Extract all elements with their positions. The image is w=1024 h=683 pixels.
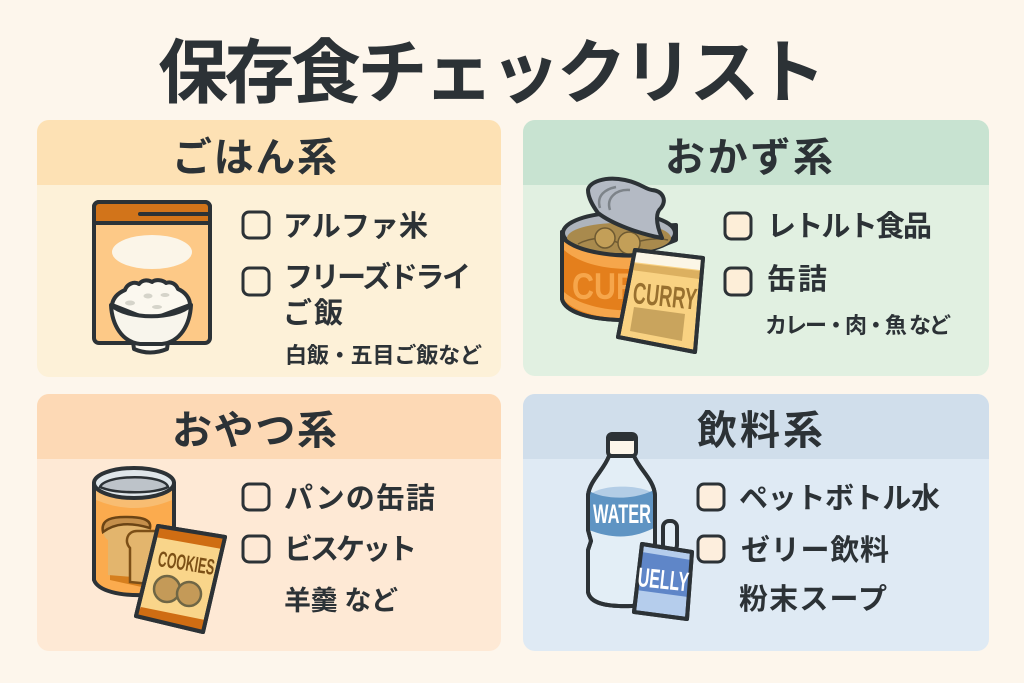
item: フリーズドライご飯: ご飯 xyxy=(283,296,343,330)
checkbox: ゼリー飲料 xyxy=(698,536,724,562)
icon: rice pouch and bowl xyxy=(94,202,210,352)
title: 保存食チェックリスト xyxy=(158,34,826,112)
icon: water bottle and jelly pouch: UELLY xyxy=(636,562,690,597)
heading: 飲料系: 飲料系 xyxy=(697,409,823,453)
checkbox: 缶詰 xyxy=(725,268,751,295)
icon: curry can and pouch: CURRY xyxy=(631,277,698,317)
icon: water bottle and jelly pouch: WATER xyxy=(593,499,651,529)
heading: おかず系: おかず系 xyxy=(665,136,833,180)
icon: bread can and cookies xyxy=(94,468,225,632)
checkbox: レトルト食品 xyxy=(725,213,751,239)
item: 粉末スープ: 粉末スープ xyxy=(739,583,887,616)
heading: おやつ系: おやつ系 xyxy=(172,409,337,453)
item: ビスケット: ビスケット xyxy=(284,533,417,566)
checkbox: ビスケット xyxy=(243,536,269,562)
checkbox: フリーズドライご飯 xyxy=(243,268,269,295)
icon: bread can and cookies: COOKIES xyxy=(156,546,216,580)
item: パンの缶詰: パンの缶詰 xyxy=(284,482,435,515)
item: アルファ米: アルファ米 xyxy=(283,210,428,243)
item: 缶詰: 缶詰 xyxy=(767,263,827,296)
panel: ごはん系 xyxy=(37,120,501,377)
item: フリーズドライご飯: フリーズドライ xyxy=(284,260,471,294)
item: ゼリー飲料: ゼリー飲料 xyxy=(741,534,889,567)
icon: water bottle and jelly pouch xyxy=(588,434,692,619)
checkbox: ペットボトル水 xyxy=(698,484,724,510)
panel: おやつ系 xyxy=(37,394,501,651)
icon: curry can and pouch: CUR xyxy=(572,266,638,307)
panel: 飲料系 xyxy=(523,394,989,651)
note: カレー・肉・魚など: カレー・肉・魚 など xyxy=(765,313,951,338)
checkbox: アルファ米 xyxy=(243,212,269,238)
note: 白飯・五目ご飯など: 白飯・五目ご飯など xyxy=(285,343,482,368)
panel: おかず系 xyxy=(523,120,989,376)
note: 羊羹など: 羊羹 など xyxy=(284,586,398,616)
heading: ごはん系: ごはん系 xyxy=(172,136,337,180)
item: ペットボトル水: ペットボトル水 xyxy=(739,482,940,515)
icon: curry can and pouch xyxy=(562,179,703,352)
checkbox: パンの缶詰 xyxy=(243,484,269,510)
item: レトルト食品: レトルト食品 xyxy=(767,210,932,243)
